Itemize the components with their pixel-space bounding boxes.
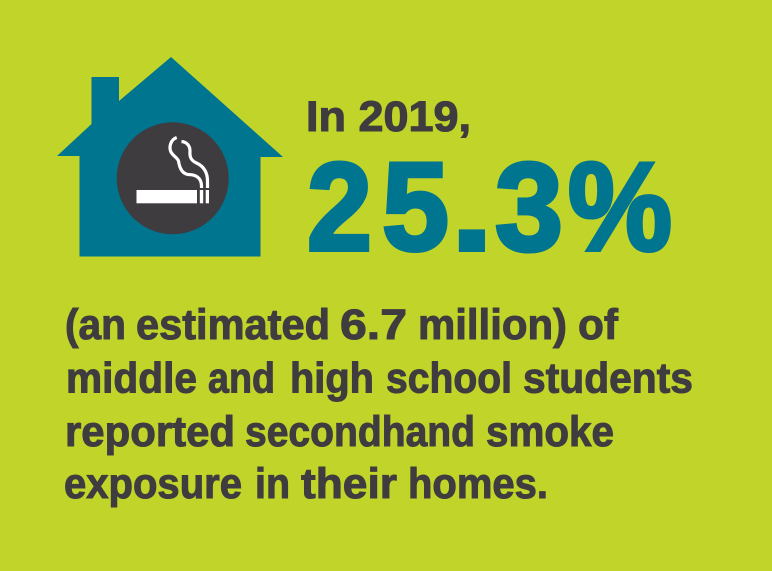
body text: exposure — [64, 460, 242, 508]
big statistic — [307, 138, 672, 277]
body text: smoke — [486, 408, 614, 456]
body text: in — [255, 460, 290, 508]
body text: high — [290, 354, 374, 402]
body text: of — [578, 301, 619, 349]
big statistic: 2 — [307, 138, 372, 277]
dark circle — [117, 122, 229, 234]
body text: secondhand — [245, 408, 475, 456]
big statistic: 3 — [495, 138, 563, 277]
big statistic: . — [451, 138, 493, 277]
heading: In 2019: In 2019, — [306, 93, 471, 141]
body text: estimated — [136, 301, 330, 349]
body text: homes. — [408, 460, 548, 508]
big statistic: 5 — [382, 138, 449, 277]
body text: middle — [66, 354, 197, 402]
cigarette — [136, 190, 209, 203]
body text — [64, 301, 693, 508]
body text: million) — [418, 301, 567, 349]
smoke — [170, 138, 208, 188]
body text: 6.7 — [340, 301, 407, 349]
body text: and — [208, 354, 275, 402]
house silhouette — [57, 57, 283, 256]
body text: (an — [65, 301, 126, 349]
big statistic: % — [568, 138, 672, 277]
body text: reported — [65, 408, 235, 456]
body text: their — [301, 460, 397, 508]
body text: students — [523, 354, 693, 402]
icon: house with cigarette — [57, 57, 283, 256]
body text: school — [386, 354, 512, 402]
